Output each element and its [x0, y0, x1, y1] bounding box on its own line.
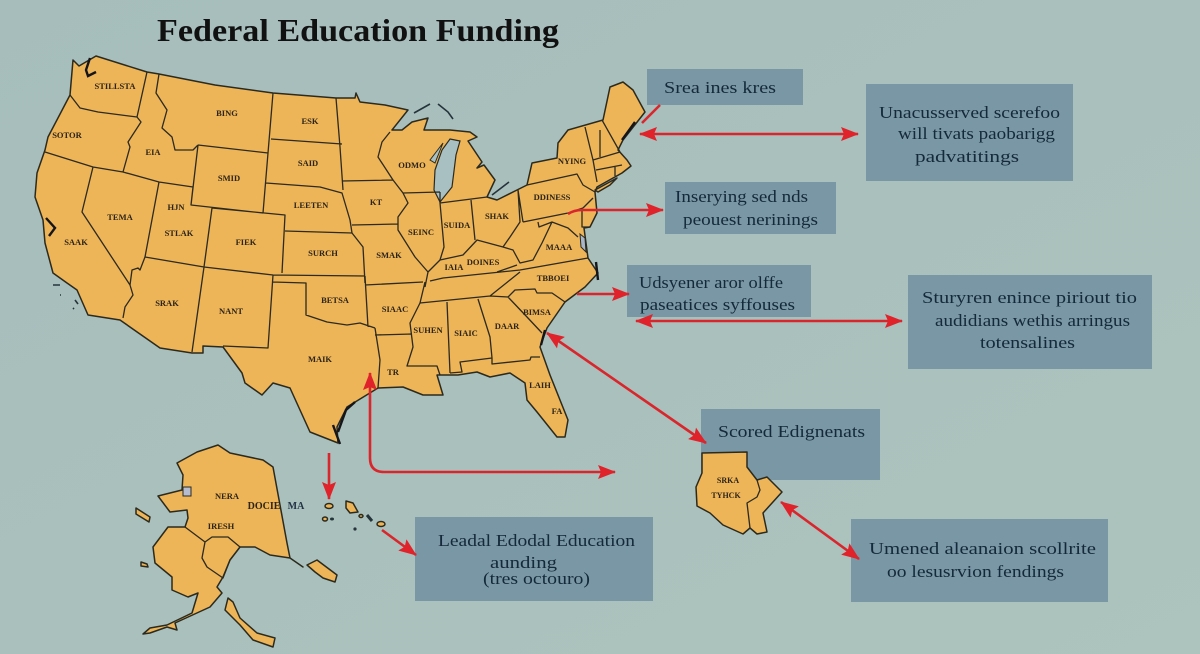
info box: Udsyener aror olffe: Udsyener aror olffe	[639, 273, 783, 292]
state labels: LEETEN	[294, 200, 329, 210]
info box: Sturyren enince piriout tio: Sturyren enince piriout tio	[922, 288, 1137, 307]
Alaska labels: DOCIE	[248, 501, 281, 512]
info box: Unacusserved scerefoo: padvatitings	[915, 147, 1019, 166]
state labels: HJN	[168, 202, 185, 212]
state labels: ODMO	[398, 160, 426, 170]
state labels: DOINES	[467, 257, 500, 267]
info box: Umened aleanaion scollrite: oo lesusrvion fendings	[887, 562, 1064, 581]
arrow: Texas elbow	[370, 373, 615, 472]
map: Hawaii islands	[322, 501, 385, 531]
state labels: NANT	[219, 306, 243, 316]
info box: Inserying sed nds: peouest nerinings	[683, 210, 818, 229]
info box: Unacusserved scerefoo: will tivats paobarigg	[898, 124, 1056, 143]
state labels: BING	[216, 108, 238, 118]
info box: Unacusserved scerefoo	[866, 84, 1073, 181]
state labels: SMAK	[376, 250, 402, 260]
state labels: KT	[370, 197, 382, 207]
Alaska labels	[208, 491, 305, 531]
state labels: IAIA	[445, 262, 464, 272]
state labels: SUHEN	[413, 325, 443, 335]
state labels: DDINESS	[534, 192, 571, 202]
land outline	[35, 56, 645, 443]
state labels: TR	[387, 367, 400, 377]
info box: Udsyener aror olffe	[627, 265, 811, 317]
Green Bay	[430, 143, 443, 163]
info box: Inserying sed nds	[665, 182, 836, 234]
Alaska labels: NERA	[215, 491, 240, 501]
state labels: SAID	[298, 158, 318, 168]
state labels: SHAK	[485, 211, 509, 221]
coastal detail strokes	[46, 58, 635, 444]
Alaska labels: MA	[288, 501, 305, 512]
state labels: SRAK	[155, 298, 179, 308]
arrow: islands to box	[382, 530, 416, 555]
arrow: Georgia to inset double	[547, 333, 706, 443]
info box: Srea ines kres: Srea ines kres	[664, 78, 776, 97]
lake marks and coastal islands	[53, 104, 509, 309]
info box: Sturyren enince piriout tio: totensalines	[980, 333, 1075, 352]
arrow: down to Hawaii	[328, 453, 330, 499]
Alaska inner border	[185, 527, 240, 578]
inset labels: SRKA	[717, 476, 739, 485]
state labels: FA	[552, 406, 563, 416]
Alaska bay	[183, 487, 191, 496]
info box: Sturyren enince piriout tio: audidians wethis arringus	[935, 311, 1130, 330]
info box: Leadal Edodal Education: aunding	[490, 553, 558, 572]
state labels: ESK	[301, 116, 319, 126]
state labels: TEMA	[107, 212, 134, 222]
state labels: SOTOR	[52, 130, 83, 140]
arrow: Carolina double	[636, 320, 902, 322]
state labels: DAAR	[495, 321, 520, 331]
info box: Unacusserved scerefoo: Unacusserved scerefoo	[879, 103, 1060, 122]
info box: Udsyener aror olffe: paseatices syffouses	[640, 295, 795, 314]
state labels	[52, 81, 587, 416]
info box: Umened aleanaion scollrite	[851, 519, 1108, 602]
inset labels	[711, 476, 741, 500]
state labels: SIAAC	[382, 304, 408, 314]
info box: Sturyren enince piriout tio	[908, 275, 1152, 369]
state borders	[45, 72, 622, 388]
state labels: SIAIC	[454, 328, 478, 338]
info box: Leadal Edodal Education: (tres octouro)	[483, 569, 590, 588]
state labels: MAAA	[546, 242, 573, 252]
info box: Umened aleanaion scollrite: Umened aleanaion scollrite	[869, 539, 1096, 558]
info box: Leadal Edodal Education	[415, 517, 653, 601]
state labels: STLAK	[165, 228, 194, 238]
arrow: inset to lower box double	[781, 502, 859, 559]
arrows	[329, 105, 902, 559]
map: Alaska	[136, 445, 337, 647]
state labels: FIEK	[236, 237, 257, 247]
state labels: SEINC	[408, 227, 434, 237]
state labels: STILLSTA	[95, 81, 136, 91]
inset map	[696, 409, 880, 534]
state labels: MAIK	[308, 354, 332, 364]
state labels: SURCH	[308, 248, 338, 258]
state labels: BETSA	[321, 295, 350, 305]
Alaska mainland	[143, 445, 303, 634]
Alaska peninsula and islands	[136, 508, 337, 647]
arrow: New England double	[640, 133, 858, 135]
state labels: TBBOEI	[537, 273, 570, 283]
state labels: BIMSA	[523, 307, 552, 317]
Long Island	[595, 178, 617, 192]
arrow: mid-Atlantic	[568, 210, 663, 214]
info box: Leadal Edodal Education: Leadal Edodal Education	[438, 531, 636, 550]
state labels: SUIDA	[444, 220, 471, 230]
state labels: SMID	[218, 173, 240, 183]
inset labels: TYHCK	[711, 491, 741, 500]
state labels: EIA	[145, 147, 161, 157]
state labels: NYING	[558, 156, 587, 166]
info box: Scored Edignenats: Scored Edignenats	[718, 422, 865, 441]
title: Federal Education Funding	[157, 12, 559, 48]
arrow: North Carolina	[577, 293, 629, 295]
map: contiguous United States	[35, 56, 645, 444]
info box: Srea ines kres	[647, 69, 803, 105]
state labels: SAAK	[64, 237, 88, 247]
Lake Michigan	[434, 139, 460, 202]
Alaska labels: IRESH	[208, 521, 235, 531]
info box: Inserying sed nds: Inserying sed nds	[675, 187, 808, 206]
arrow: Maine leader	[642, 105, 660, 123]
state labels: LAIH	[529, 380, 551, 390]
inset border	[747, 480, 760, 528]
inset state shape	[696, 452, 782, 534]
Chesapeake Bay	[580, 234, 586, 252]
info box: Scored Edignenats	[701, 409, 880, 480]
